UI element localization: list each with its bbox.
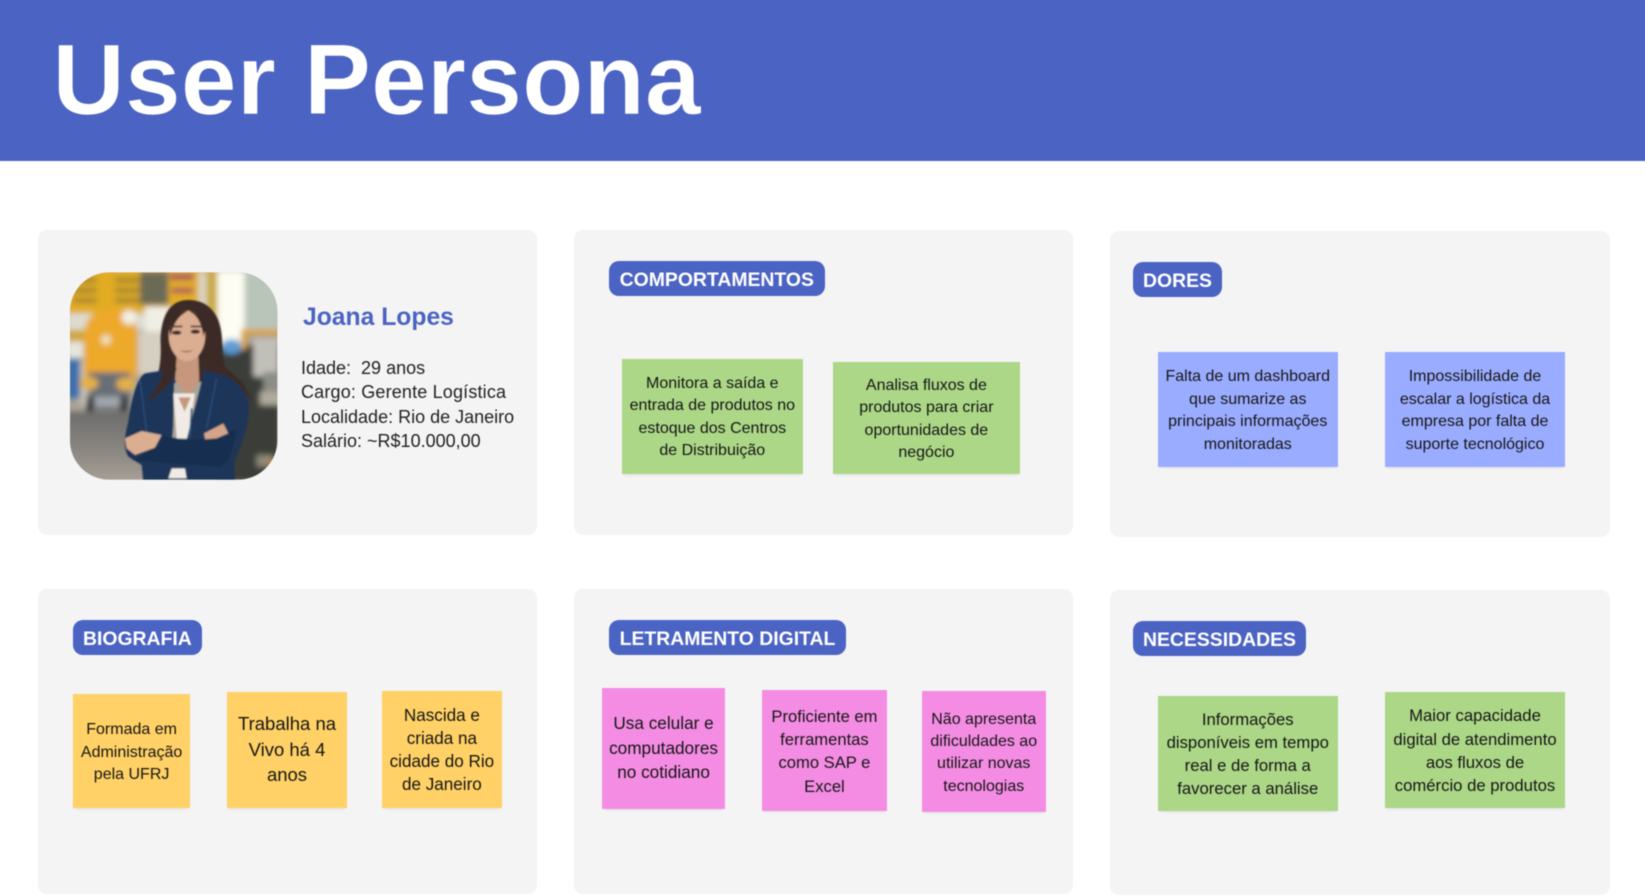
sticky note: ferramentas [762, 690, 887, 811]
sticky note: analisa: produtos para criar [859, 399, 994, 416]
sticky note: capacidade [1385, 692, 1565, 808]
sticky note: formação [73, 694, 190, 808]
sticky note: trabalho: Trabalha na [238, 713, 336, 734]
heading: biografia: BIOGRAFIA [83, 628, 192, 650]
sticky note: dashboard [1158, 352, 1338, 467]
sticky note: ferramentas: Excel [804, 777, 845, 796]
panel: letramento digital [574, 589, 1073, 894]
sticky note: analisa: negócio [898, 444, 954, 461]
panel: dores [1110, 231, 1610, 537]
sticky note: dashboard: principais informações [1168, 413, 1327, 430]
face [169, 310, 205, 361]
sticky note: tecnologias: utilizar novas [937, 755, 1030, 772]
heading: dores: DORES [1143, 270, 1212, 292]
sticky note: origem: Nascida e [404, 706, 480, 725]
sticky note: logística: empresa por falta de [1402, 413, 1548, 430]
heading: comportamentos [609, 261, 825, 296]
sticky note: logística: escalar a logística da [1400, 391, 1550, 408]
sticky note: origem [382, 691, 502, 808]
sticky note: origem: cidade do Rio [390, 752, 494, 771]
sticky note: monitora: de Distribuição [659, 442, 765, 459]
sticky note: logística: suporte tecnológico [1406, 436, 1544, 453]
sticky note: logística [1385, 352, 1565, 467]
hair strands over shoulders [147, 368, 249, 401]
photo: Joana Lopes portrait [69, 272, 278, 480]
blouse [173, 393, 195, 438]
sticky note: trabalho [227, 692, 347, 808]
sticky note: tecnologias: dificuldades ao [930, 733, 1037, 750]
sticky note: analisa: oportunidades de [865, 422, 988, 439]
sticky note: celular: Usa celular e [613, 713, 714, 733]
panel: necessidades [1110, 590, 1610, 895]
sticky note: monitora: entrada de produtos no [630, 397, 795, 414]
sticky note: capacidade: aos fluxos de [1426, 753, 1524, 772]
sticky note: ferramentas: como SAP e [778, 753, 870, 772]
sticky note: monitora [622, 359, 803, 474]
sticky note: formação: Formada em [86, 721, 177, 738]
sticky note: origem: de Janeiro [402, 775, 482, 794]
hand right [204, 423, 228, 439]
sticky note: tecnologias: Não apresenta [931, 711, 1036, 728]
sticky note: trabalho: Vivo há 4 [249, 739, 325, 760]
sticky note: dashboard: Falta de um dashboard [1165, 368, 1330, 385]
heading: comportamentos: COMPORTAMENTOS [620, 269, 814, 291]
sticky note: dashboard: que sumarize as [1189, 391, 1306, 408]
sticky note: logística: Impossibilidade de [1409, 368, 1541, 385]
heading: dores [1133, 262, 1222, 297]
sticky note: capacidade: Maior capacidade [1409, 706, 1541, 725]
heading: letramento digital [609, 620, 846, 655]
neck [175, 355, 199, 397]
heading: necessidades [1133, 621, 1306, 656]
heading: necessidades: NECESSIDADES [1143, 629, 1296, 651]
sticky note: celular [602, 688, 725, 809]
sticky note: capacidade: digital de atendimento [1393, 730, 1557, 749]
sticky note: ferramentas: Proficiente em [771, 707, 877, 726]
sticky note: monitora: estoque dos Centros [638, 420, 786, 437]
sticky note: dashboard: monitoradas [1204, 436, 1292, 453]
sticky note: informações [1158, 696, 1338, 811]
sticky note: formação: Administração [81, 744, 182, 761]
sticky note: analisa [833, 362, 1020, 474]
sticky note: tecnologias: tecnologias [943, 778, 1024, 795]
heading: biografia [73, 620, 202, 655]
panel: comportamentos [574, 230, 1073, 535]
profile details: Idade: 29 anos Cargo: Gerente Logística Localidade: Rio de Janeiro Salário: ~R$10.000,00 [301, 358, 514, 451]
sticky note: informações: favorecer a análise [1177, 779, 1318, 798]
title: User Persona [52, 24, 701, 136]
sticky note: trabalho: anos [267, 764, 307, 785]
sticky note: tecnologias [922, 691, 1046, 812]
sticky note: informações: real e de forma a [1185, 756, 1311, 775]
sticky note: capacidade: comércio de produtos [1395, 776, 1555, 795]
sticky note: celular: computadores [609, 738, 718, 758]
sticky note: informações: disponíveis em tempo [1167, 733, 1329, 752]
sticky note: monitora: Monitora a saída e [646, 375, 779, 392]
panel: biografia [38, 589, 537, 894]
sticky note: informações: Informações [1202, 710, 1294, 729]
sticky note: ferramentas: ferramentas [780, 730, 869, 749]
sticky note: celular: no cotidiano [617, 762, 710, 782]
sticky note: origem: criada na [407, 729, 477, 748]
hand left [125, 431, 162, 455]
heading: letramento digital: LETRAMENTO DIGITAL [620, 628, 835, 650]
hair [158, 298, 230, 384]
jacket [125, 368, 249, 482]
name: Joana Lopes [303, 304, 454, 331]
sticky note: analisa: Analisa fluxos de [866, 377, 987, 394]
header banner [0, 0, 1645, 161]
panel: profile [38, 230, 537, 535]
sticky note: formação: pela UFRJ [94, 766, 169, 783]
